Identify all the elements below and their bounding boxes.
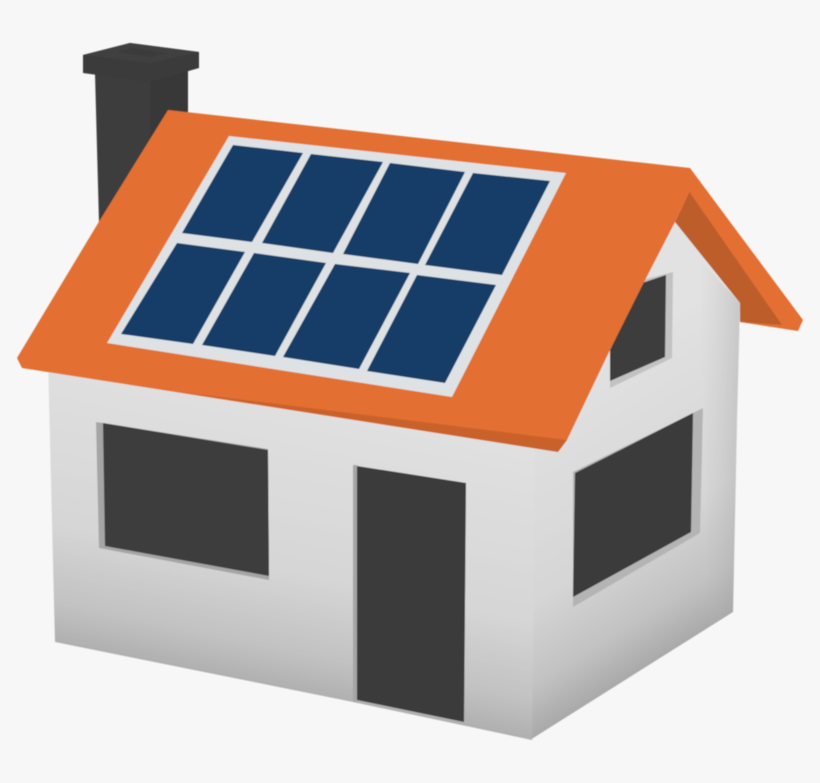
roof <box>17 110 803 452</box>
roof: main slope <box>17 110 690 452</box>
panel frame <box>107 136 566 397</box>
wall: side <box>530 222 740 740</box>
solar panel <box>107 136 566 397</box>
panel cells <box>182 145 303 242</box>
roof: eave strip <box>180 392 567 452</box>
chimney <box>83 43 199 222</box>
roof: gable rim <box>688 168 803 331</box>
wall: front <box>48 360 535 740</box>
front window <box>96 422 269 580</box>
door <box>353 465 466 722</box>
wall: side right-edge shading <box>700 260 740 626</box>
side window upper <box>610 272 673 388</box>
roof: gable underside <box>675 190 785 326</box>
side window lower <box>573 408 703 607</box>
